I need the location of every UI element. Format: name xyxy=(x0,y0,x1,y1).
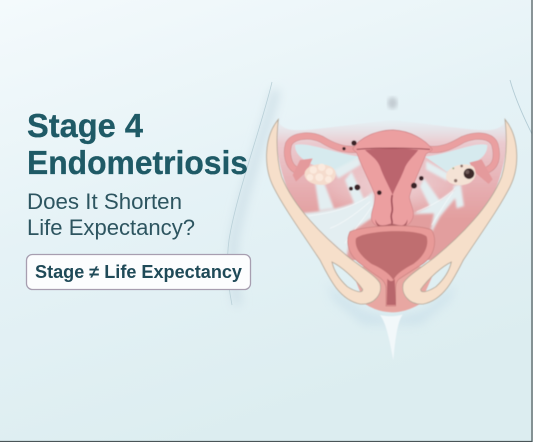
subtitle: Does It Shorten xyxy=(27,189,182,214)
pelvic floor xyxy=(350,267,437,312)
vaginal cleft xyxy=(380,314,403,360)
title: Endometriosis xyxy=(27,144,248,181)
body silhouette xyxy=(228,80,532,305)
right pelvic bone xyxy=(403,119,517,304)
icon: navel xyxy=(388,97,398,109)
right ovary with cyst xyxy=(446,164,476,185)
left pelvic bone xyxy=(267,119,381,304)
pelvis illustration xyxy=(267,119,517,360)
subtitle: Life Expectancy? xyxy=(27,215,195,240)
subtitle xyxy=(27,189,195,240)
bladder xyxy=(348,226,435,306)
title xyxy=(27,107,248,181)
uterine cavity xyxy=(365,148,418,195)
right fallopian tube xyxy=(430,136,496,184)
left ovary xyxy=(305,164,336,185)
cervical canal xyxy=(391,195,392,224)
ligament strands xyxy=(308,188,455,243)
callout: stage not equal life expectancy: Stage ≠ Life Expectancy xyxy=(35,262,242,282)
light tissue behind the tubes xyxy=(295,144,360,172)
endometriosis lesions xyxy=(342,140,424,195)
pelvic cavity xyxy=(276,120,507,260)
soft shadow below pelvis xyxy=(327,283,457,325)
title: Stage 4 xyxy=(27,107,144,144)
callout: stage not equal life expectancy xyxy=(26,254,250,290)
uterus xyxy=(353,130,432,230)
white ligaments xyxy=(300,157,464,257)
left fallopian tube xyxy=(287,136,355,182)
